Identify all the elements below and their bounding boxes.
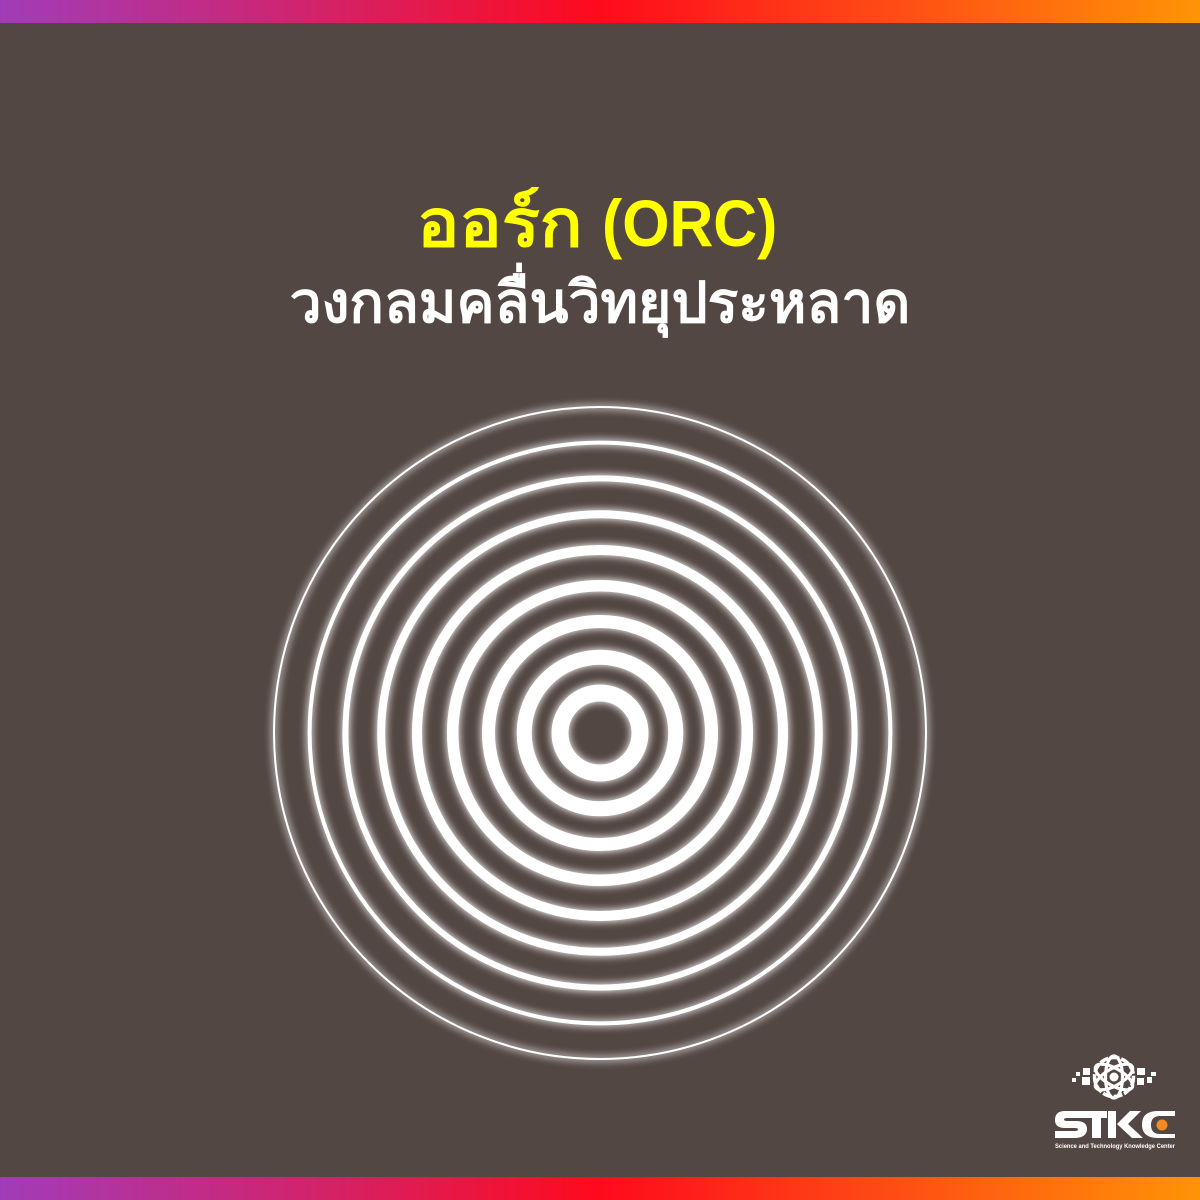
title: ORC: ออร์ก [417,186,583,260]
title: ORC: (ORC) [602,186,777,260]
subtitle: strange radio circles: วงกลมคลื่นวิทยุประหลาด [290,271,910,335]
logo wordmark STKC [1055,1111,1175,1138]
icon: pixel squares [1072,1068,1156,1085]
logo tagline: Science and Technology Knowledge Center [1055,1144,1176,1150]
top gradient bar [0,0,1200,23]
bottom gradient bar [0,1177,1200,1200]
glow layer [274,407,926,1059]
icon: atom [1092,1056,1136,1098]
sharp rings [274,407,926,1059]
logo orange dot [1156,1120,1168,1130]
title: ORC [417,186,777,260]
